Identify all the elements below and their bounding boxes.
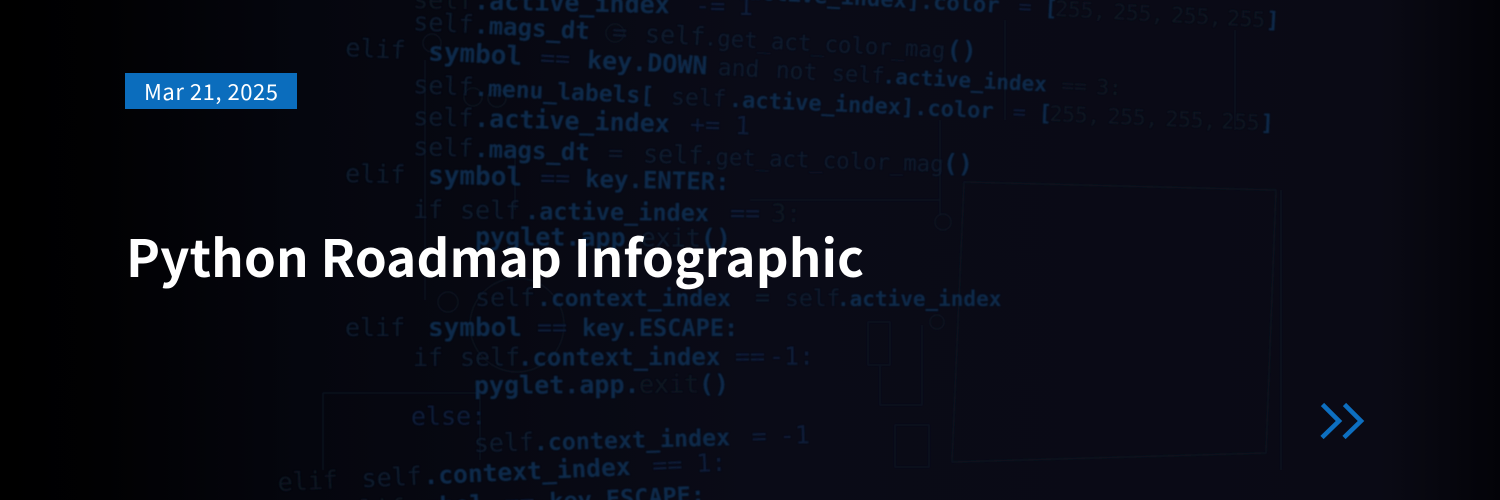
code line: self xyxy=(413,102,474,133)
code line: self xyxy=(831,62,885,89)
code line: .active_index xyxy=(474,104,670,138)
code line: 255 xyxy=(1221,109,1260,135)
code line: 1 xyxy=(735,111,751,140)
code line: self xyxy=(670,84,727,113)
date badge: Mar 21, 2025 xyxy=(144,75,278,107)
code line: ] xyxy=(1260,111,1274,137)
code line: symbol xyxy=(428,161,522,193)
code line: 3: xyxy=(1096,75,1122,100)
code line: 255, xyxy=(1049,102,1101,128)
code line: and xyxy=(717,55,760,83)
code line: .get_act_color_mag xyxy=(702,144,944,178)
code line: == xyxy=(652,450,683,480)
icon: double chevron arrow xyxy=(1322,404,1361,438)
code line: self xyxy=(473,427,534,458)
code line: elif xyxy=(345,33,406,65)
date badge xyxy=(125,73,297,109)
code line: elif xyxy=(345,313,405,342)
code line: = xyxy=(1012,100,1026,126)
code line: self xyxy=(644,19,706,51)
code line: () xyxy=(946,35,978,66)
code line: self xyxy=(413,70,474,102)
code line: self xyxy=(643,139,704,170)
code line: = xyxy=(608,138,624,168)
code line: self xyxy=(460,195,520,225)
code line: else: xyxy=(411,401,486,431)
code line: += xyxy=(690,110,721,140)
code line: self xyxy=(785,286,840,312)
code line: .context_index xyxy=(537,286,731,312)
code line: self xyxy=(460,343,520,372)
code line: = xyxy=(611,17,628,47)
code line: if xyxy=(413,195,443,224)
code line: == xyxy=(539,43,571,73)
code line: .context_index xyxy=(533,424,730,456)
code line: elif xyxy=(345,159,406,189)
circuit diagram background xyxy=(323,20,1281,470)
code line: 3: xyxy=(771,199,801,228)
code line: if xyxy=(413,343,443,372)
code line: .mags_dt xyxy=(474,11,591,45)
code line: exit xyxy=(639,369,699,399)
code line: 1: xyxy=(696,448,727,478)
code line: 255 xyxy=(1227,6,1266,32)
code line: key.DOWN xyxy=(586,45,708,80)
code line: .context_index xyxy=(518,343,720,372)
code line: ] xyxy=(1265,8,1280,34)
code line: pyglet.app. xyxy=(474,370,640,400)
code listing background xyxy=(277,0,1280,500)
code line: == xyxy=(730,198,760,228)
code line: == xyxy=(537,313,567,342)
code line: key.ESCAPE: xyxy=(582,314,738,342)
code line: .active_index xyxy=(525,197,709,227)
code line: == xyxy=(540,163,571,193)
code line: = xyxy=(755,283,770,312)
code line: .active_index xyxy=(882,64,1048,97)
code line: .get_act_color_mag xyxy=(703,25,946,64)
code line: .menu_labels[ xyxy=(474,76,655,110)
code line: self xyxy=(413,7,474,39)
code line: .active_index xyxy=(837,287,1002,311)
code line: 255, xyxy=(1171,3,1222,30)
code line: key.ENTER: xyxy=(585,165,730,196)
code line: elif xyxy=(277,465,338,497)
code line: -1: xyxy=(769,342,814,371)
code line: .context_index xyxy=(423,452,631,490)
code line: 255, xyxy=(1165,107,1217,133)
code line: .mags_dt xyxy=(474,135,590,167)
code line: 255, xyxy=(1107,104,1159,131)
code line: self xyxy=(361,461,422,493)
code line: symbol xyxy=(428,313,522,343)
code line: 255, xyxy=(1113,0,1165,27)
code line: = xyxy=(751,421,767,451)
code line: () xyxy=(943,149,974,179)
code line: not xyxy=(775,58,818,86)
code line: pyglet.app.exit() xyxy=(475,222,731,253)
code line: self xyxy=(413,132,474,163)
code line: .active_index].color xyxy=(728,88,994,124)
code line: == xyxy=(735,342,765,371)
code line: == xyxy=(1061,73,1087,99)
code line: symbol xyxy=(428,37,523,72)
title: Python Roadmap Infographic xyxy=(126,218,864,292)
code line: self xyxy=(475,283,535,312)
code line: [ xyxy=(1038,101,1052,127)
code line: -1 xyxy=(779,420,810,450)
code line: () xyxy=(699,369,729,398)
